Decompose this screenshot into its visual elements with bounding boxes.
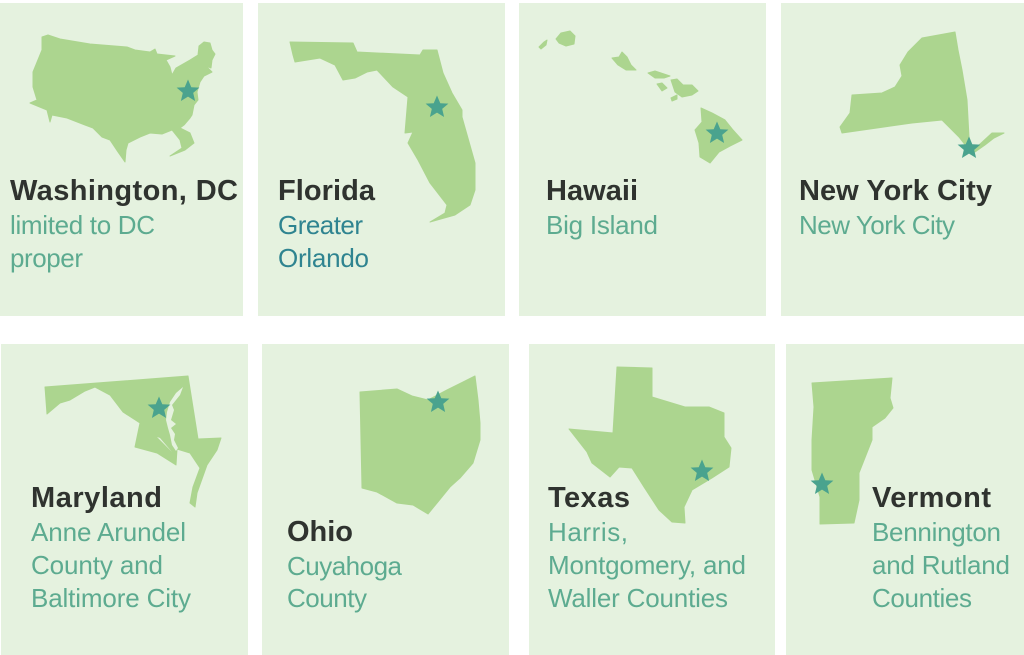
subtext: limited to DC <box>10 210 155 240</box>
subtext: Harris, <box>548 517 628 547</box>
map: Chesapeake Bay inlets <box>157 387 183 452</box>
heading: Vermont <box>872 482 991 514</box>
subtext: Greater <box>278 210 363 240</box>
panel: Florida <box>258 3 505 316</box>
map: Ohio <box>360 376 480 514</box>
subtext: Big Island <box>546 210 658 240</box>
panel: Texas <box>529 344 775 655</box>
heading: Maryland <box>31 482 162 514</box>
star: DC location <box>177 80 199 101</box>
star: Anne Arundel County and Baltimore City <box>148 396 170 418</box>
heading: Texas <box>548 482 630 514</box>
map: United States <box>30 35 215 162</box>
map: New York <box>840 32 1004 152</box>
heading: Florida <box>278 175 376 207</box>
panel: Hawaii <box>519 3 766 316</box>
subtext line 2: Orlando <box>278 243 369 273</box>
star: Bennington and Rutland Counties <box>811 472 833 494</box>
subtext line 2: County and <box>31 550 163 580</box>
map: Vermont <box>812 378 893 524</box>
star: Harris, Montgomery, and Waller Counties <box>691 460 713 481</box>
subtext line 2: County <box>287 583 367 613</box>
subtext: New York City <box>799 210 955 240</box>
star: New York City <box>958 136 980 158</box>
subtext line 3: Counties <box>872 583 972 613</box>
map: Texas <box>569 367 731 523</box>
heading: Ohio <box>287 516 353 548</box>
panel: Maryland <box>1 344 248 655</box>
subtext line 2: and Rutland <box>872 550 1010 580</box>
map: Maryland <box>45 376 221 507</box>
map: Hawaiian islands <box>539 31 742 163</box>
subtext line 2: Montgomery, and <box>548 550 746 580</box>
subtext: Cuyahoga <box>287 551 403 581</box>
panel: Vermont <box>786 344 1024 655</box>
panel: Washington, DC <box>0 3 243 316</box>
subtext line 3: Waller Counties <box>548 583 728 613</box>
subtext line 2: proper <box>10 243 83 273</box>
subtext: Bennington <box>872 517 1001 547</box>
subtext line 3: Baltimore City <box>31 583 191 613</box>
panel: New York City <box>781 3 1024 316</box>
heading: New York City <box>799 175 992 207</box>
panel: Ohio <box>262 344 509 655</box>
heading: Hawaii <box>546 175 638 207</box>
map: Florida <box>290 42 475 222</box>
star: Cuyahoga County <box>427 390 449 412</box>
subtext: Anne Arundel <box>31 517 186 547</box>
star: Big Island <box>706 122 728 143</box>
star: Greater Orlando <box>426 96 448 117</box>
heading: Washington, DC <box>10 175 238 207</box>
